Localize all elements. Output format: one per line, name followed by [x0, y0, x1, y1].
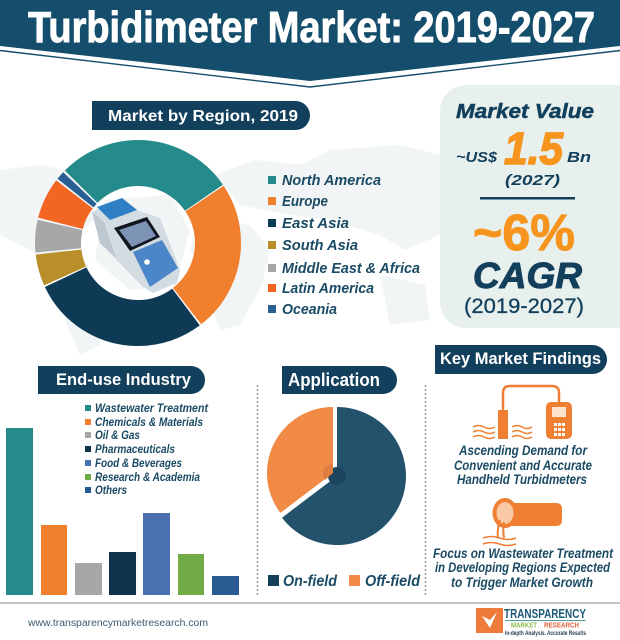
logo: transparency market research: TRANSPARENCY [504, 606, 586, 621]
logo: transparency market research [476, 606, 587, 637]
finding 2 text [433, 545, 614, 590]
legend: market by region: Middle East & Africa [282, 260, 420, 277]
donut chart: market by region [58, 163, 218, 323]
world map background [0, 145, 440, 355]
icon: wastewater pipe [483, 498, 562, 546]
bar chart: end-use industry [6, 428, 239, 595]
market value figure [456, 123, 591, 189]
logo: transparency market research: MARKET [511, 622, 538, 630]
CAGR period: (2019-2027) [464, 295, 584, 318]
heading: market by region [92, 101, 310, 130]
heading: market by region: Market by Region, 2019 [108, 108, 298, 125]
legend: end-use industry [85, 403, 209, 497]
legend: application [268, 573, 421, 590]
legend: end-use industry: Oil & Gas [95, 430, 140, 442]
logo: transparency market research: In-depth Analysis. Accurate Results [505, 631, 587, 637]
heading: key market findings [435, 345, 607, 374]
finding 1 text: Handheld Turbidmeters [457, 471, 587, 487]
market value figure: ~US$ [456, 149, 498, 166]
market value figure: Bn [567, 149, 591, 166]
market value label: Market Value [456, 101, 594, 123]
heading: application: Application [288, 370, 380, 390]
legend: end-use industry: Pharmaceuticals [95, 444, 175, 456]
CAGR figure: ~6% [473, 204, 575, 261]
legend: market by region: North America [282, 172, 381, 189]
legend: end-use industry: Food & Beverages [95, 458, 182, 470]
finding 1 text: Ascending Demand for [458, 442, 588, 458]
finding 2 text: to Trigger Market Growth [451, 574, 593, 590]
legend: market by region: South Asia [282, 237, 358, 254]
market value figure: 1.5 [504, 123, 564, 174]
finding 1 text: Convenient and Accurate [454, 457, 592, 473]
legend: application: Off-field [365, 573, 421, 590]
legend: end-use industry: Research & Academia [95, 472, 201, 484]
icon: probe in water with handheld meter [473, 386, 572, 439]
legend: end-use industry: Chemicals & Materials [95, 417, 203, 429]
market value figure: (2027) [505, 172, 560, 189]
logo: transparency market research: RESEARCH [544, 622, 579, 630]
legend: market by region: Latin America [282, 280, 374, 297]
panel: market value and CAGR [440, 85, 620, 328]
legend: end-use industry: Others [95, 485, 127, 497]
pie chart: application [267, 407, 406, 545]
legend: market by region: Oceania [282, 301, 337, 318]
heading: end-use industry: End-use Industry [56, 370, 192, 389]
legend: market by region: East Asia [282, 215, 349, 232]
legend: application: On-field [283, 573, 338, 590]
title banner [0, 0, 620, 87]
legend: market by region [268, 172, 420, 318]
footer website: www.transparencymarketresearch.com [27, 617, 208, 629]
CAGR label: CAGR [473, 255, 582, 296]
heading: end-use industry [38, 366, 205, 394]
legend: market by region: Europe [282, 193, 328, 210]
heading: key market findings: Key Market Findings [440, 349, 601, 368]
icon: handheld turbidimeter device [92, 198, 180, 293]
legend: end-use industry: Wastewater Treatment [95, 403, 209, 415]
heading: application [282, 366, 397, 394]
finding 1 text [454, 442, 592, 487]
